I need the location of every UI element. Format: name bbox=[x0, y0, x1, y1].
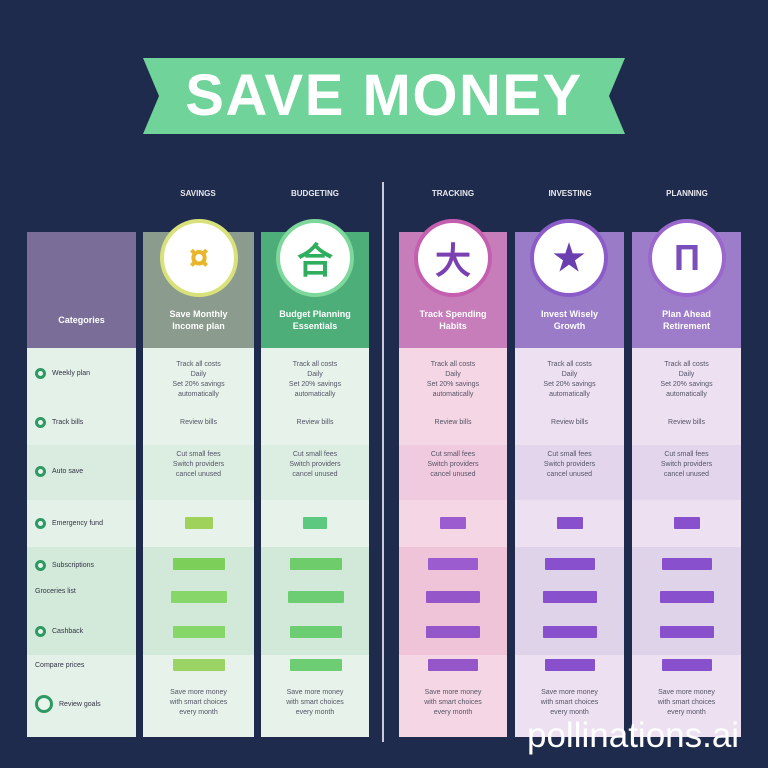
panel: budgeting column: Switch providers bbox=[289, 461, 341, 468]
panel: planning column: Daily bbox=[679, 371, 694, 378]
panel: savings column: automatically bbox=[178, 391, 219, 398]
icons row bbox=[160, 219, 726, 297]
watermark: pollinations.ai bbox=[527, 716, 739, 755]
panel: tracking column: Habits bbox=[439, 321, 467, 331]
panel: investing column: Track all costs bbox=[547, 361, 592, 368]
panel: tracking column: Cut small fees bbox=[431, 451, 475, 458]
panel: planning column: Track all costs bbox=[664, 361, 709, 368]
panel: savings column bbox=[143, 232, 254, 737]
panel: planning column: cancel unused bbox=[664, 471, 709, 478]
column labels: PLANNING bbox=[666, 189, 708, 198]
panel: tracking column bbox=[399, 232, 507, 737]
panel: labels column: Auto save bbox=[52, 468, 83, 475]
panel: budgeting column: every month bbox=[296, 709, 334, 716]
panel: investing column bbox=[515, 232, 624, 737]
panel: labels column: Subscriptions bbox=[52, 562, 94, 569]
panel: savings column: Switch providers bbox=[173, 461, 224, 468]
panel: budgeting column: Track all costs bbox=[293, 361, 337, 368]
panel: investing column: Cut small fees bbox=[547, 451, 592, 458]
panel: planning column: Save more money bbox=[658, 689, 715, 696]
panel: budgeting column: cancel unused bbox=[292, 471, 338, 478]
panel: savings column: Review bills bbox=[180, 419, 217, 426]
icons row: ★ bbox=[553, 237, 585, 278]
column labels: TRACKING bbox=[432, 189, 474, 198]
panel: savings column: every month bbox=[179, 709, 218, 716]
panel: tracking column: automatically bbox=[433, 391, 473, 398]
panel: savings column: Set 20% savings bbox=[172, 381, 225, 388]
panel: savings column: cancel unused bbox=[176, 471, 221, 478]
panel: planning column: Set 20% savings bbox=[660, 381, 713, 388]
panel: investing column: Set 20% savings bbox=[543, 381, 596, 388]
panel: planning column: every month bbox=[667, 709, 706, 716]
panel: labels column: Groceries list bbox=[35, 588, 76, 595]
panel: labels column: Categories bbox=[58, 315, 105, 325]
panel: budgeting column: Save more money bbox=[287, 689, 343, 696]
panel: tracking column: Review bills bbox=[435, 419, 471, 426]
panel: budgeting column: automatically bbox=[295, 391, 335, 398]
panel: budgeting column: with smart choices bbox=[286, 699, 344, 706]
panel: labels column: Emergency fund bbox=[52, 520, 103, 527]
panel: labels column: Cashback bbox=[52, 628, 83, 635]
panel: investing column: Save more money bbox=[541, 689, 598, 696]
panel: budgeting column: Daily bbox=[307, 371, 323, 378]
panel: savings column: with smart choices bbox=[170, 699, 227, 706]
panel: labels column: Review goals bbox=[59, 700, 101, 708]
panel: investing column: Switch providers bbox=[544, 461, 595, 468]
panel: budgeting column: Cut small fees bbox=[293, 451, 337, 458]
panel: tracking column: Track all costs bbox=[431, 361, 475, 368]
panel: investing column: Invest Wisely bbox=[541, 309, 598, 319]
column labels: BUDGETING bbox=[291, 189, 339, 198]
panel: tracking column: Switch providers bbox=[427, 461, 479, 468]
panel: planning column bbox=[632, 232, 741, 737]
panel: savings column: Cut small fees bbox=[176, 451, 221, 458]
panel: savings column: Daily bbox=[191, 371, 206, 378]
column labels: INVESTING bbox=[548, 189, 592, 198]
panel: tracking column: with smart choices bbox=[424, 699, 482, 706]
panel: planning column: Review bills bbox=[668, 419, 705, 426]
panel: planning column: Plan Ahead bbox=[662, 309, 711, 319]
icons row: ¤ bbox=[189, 237, 209, 278]
icons row: 大 bbox=[435, 240, 471, 281]
panel: budgeting column: Set 20% savings bbox=[289, 381, 341, 388]
panel: investing column: automatically bbox=[549, 391, 590, 398]
panel: labels column: Compare prices bbox=[35, 662, 84, 669]
panel: investing column: with smart choices bbox=[541, 699, 598, 706]
panel: budgeting column bbox=[261, 232, 369, 737]
panel: savings column: Income plan bbox=[172, 321, 225, 331]
panel: tracking column: Daily bbox=[445, 371, 461, 378]
panel: planning column: Cut small fees bbox=[664, 451, 709, 458]
panel: tracking column: Save more money bbox=[425, 689, 481, 696]
panel: tracking column: cancel unused bbox=[430, 471, 476, 478]
icons row: 合 bbox=[297, 240, 333, 281]
panel: investing column: cancel unused bbox=[547, 471, 592, 478]
panel: investing column: every month bbox=[550, 709, 589, 716]
panel: planning column: with smart choices bbox=[658, 699, 715, 706]
icons row: Π bbox=[674, 237, 700, 278]
panel: labels column: Weekly plan bbox=[52, 370, 90, 377]
panel: investing column: Growth bbox=[554, 321, 585, 331]
panel: tracking column: every month bbox=[434, 709, 472, 716]
panel: planning column: Switch providers bbox=[661, 461, 712, 468]
panel: labels column bbox=[27, 232, 136, 737]
panel: savings column: Save more money bbox=[170, 689, 227, 696]
panel: investing column: Daily bbox=[562, 371, 577, 378]
column labels bbox=[180, 189, 708, 198]
panel: investing column: Review bills bbox=[551, 419, 588, 426]
title banner: SAVE MONEY bbox=[185, 63, 583, 128]
divider line bbox=[382, 182, 384, 742]
panel: budgeting column: Review bills bbox=[297, 419, 333, 426]
panel: planning column: Retirement bbox=[663, 321, 710, 331]
panel: labels column: Track bills bbox=[52, 419, 83, 426]
panel: planning column: automatically bbox=[666, 391, 707, 398]
panel: savings column: Save Monthly bbox=[169, 309, 228, 319]
panel: budgeting column: Essentials bbox=[293, 321, 337, 331]
panel: tracking column: Track Spending bbox=[419, 309, 487, 319]
panel: savings column: Track all costs bbox=[176, 361, 221, 368]
panel: tracking column: Set 20% savings bbox=[427, 381, 479, 388]
panel: budgeting column: Budget Planning bbox=[279, 309, 351, 319]
column labels: SAVINGS bbox=[180, 189, 216, 198]
